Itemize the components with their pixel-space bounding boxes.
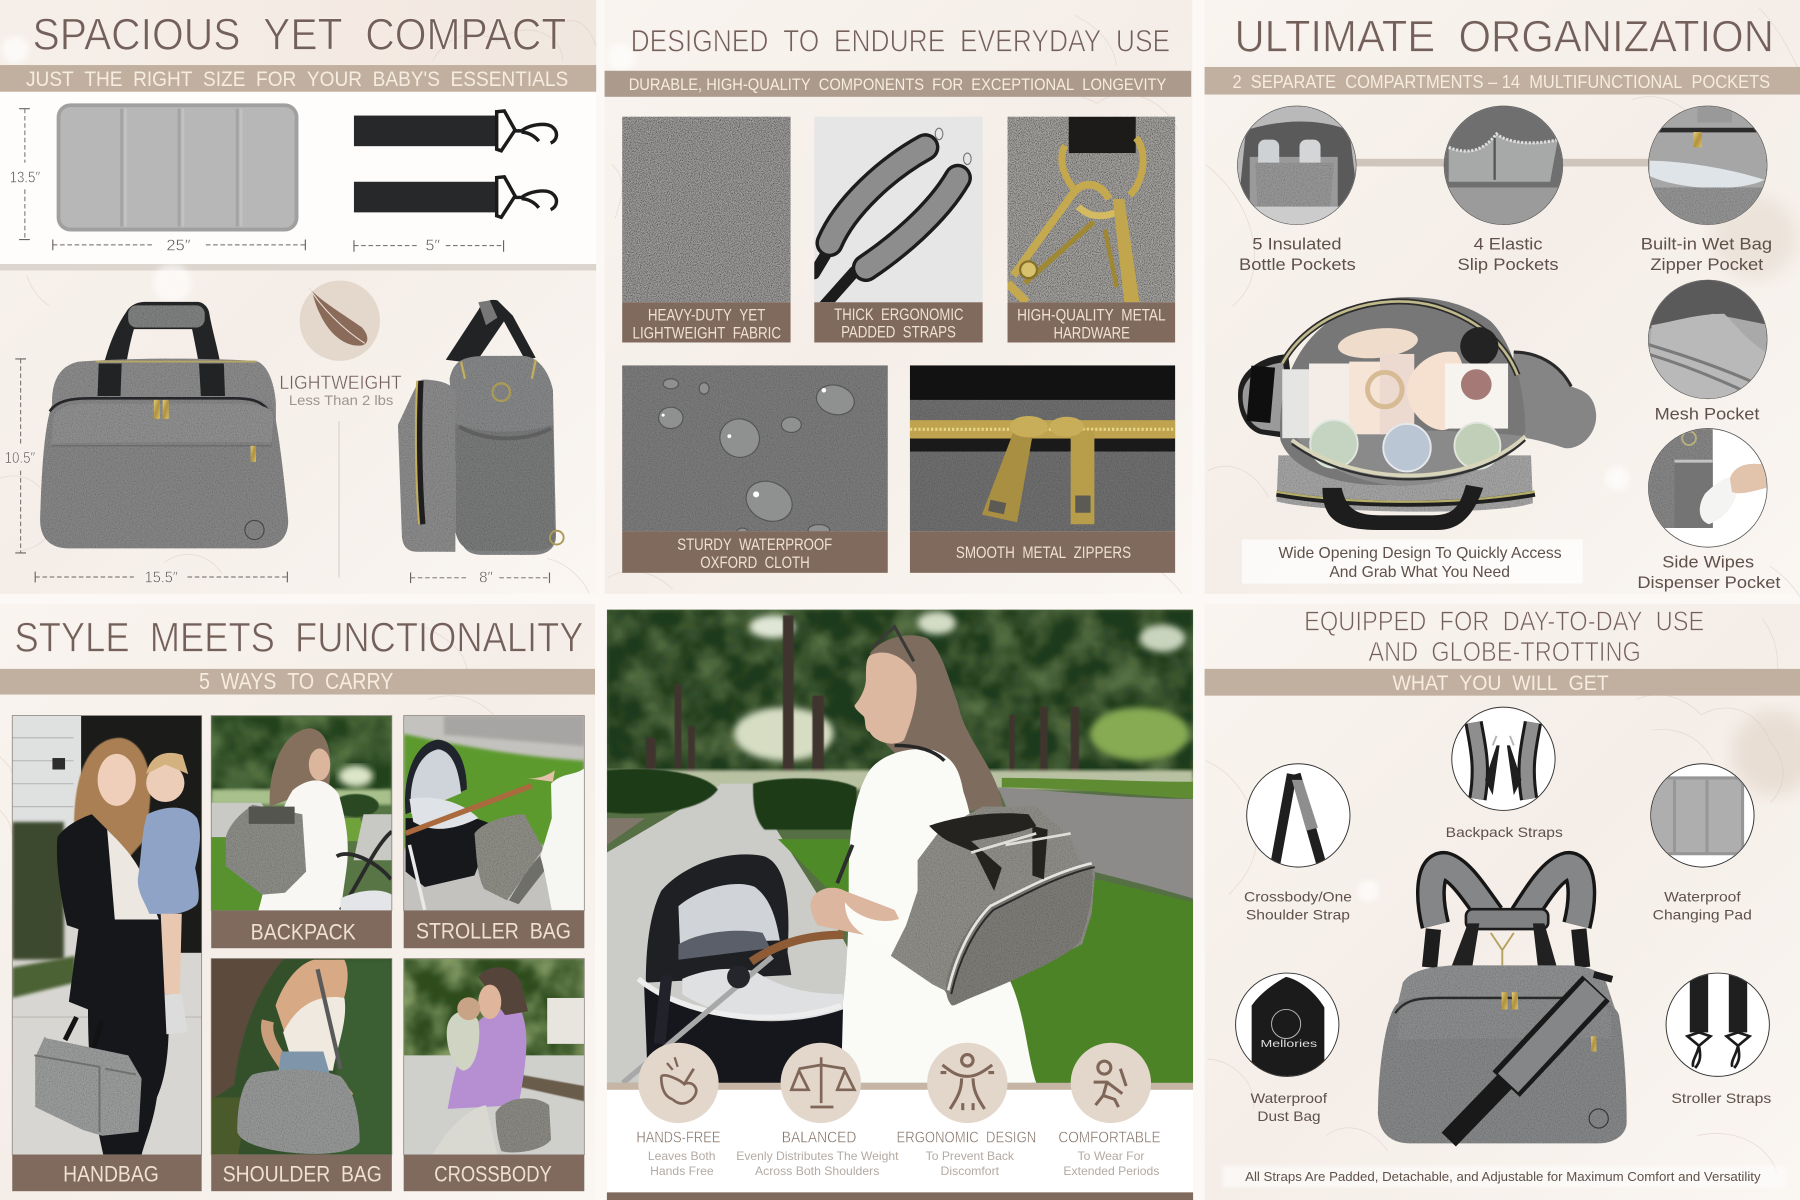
caption: wide opening <box>1242 540 1583 584</box>
dimension 13.5 <box>10 109 40 240</box>
changing pad <box>57 103 298 232</box>
title: EQUIPPED FOR DAY-TO-DAY USE <box>1304 606 1704 637</box>
title: ULTIMATE ORGANIZATION <box>1234 13 1774 62</box>
benefit labels: Evenly Distributes The Weight <box>736 1149 899 1163</box>
dimension 10.5: 10.5″ <box>5 449 35 467</box>
caption: wide opening: And Grab What You Need <box>1329 563 1510 581</box>
tile: backpack: BACKPACK <box>251 919 356 944</box>
tile: padded straps: THICK ERGONOMIC <box>834 306 964 324</box>
bag side view <box>398 300 564 555</box>
bag with backpack straps <box>1378 866 1627 1143</box>
dimension 25: 25″ <box>166 237 191 255</box>
circle: stroller straps <box>1666 971 1769 1076</box>
label: dust bag: Waterproof <box>1251 1090 1327 1106</box>
title <box>1304 606 1704 667</box>
dimension 25 <box>53 237 305 255</box>
label: changing pad: Changing Pad <box>1653 907 1752 923</box>
caption: wide opening: Wide Opening Design To Quickly Access <box>1278 544 1562 562</box>
tile: stroller bag: STROLLER BAG <box>416 918 571 943</box>
label: changing pad <box>1653 889 1752 923</box>
labels: top pockets: Slip Pockets <box>1458 255 1559 274</box>
subtitle band: 5 WAYS TO CARRY <box>199 668 393 694</box>
label: dust bag: Dust Bag <box>1257 1108 1321 1124</box>
title: SPACIOUS YET COMPACT <box>33 11 566 60</box>
stroller strap top <box>354 111 557 151</box>
benefit labels: Leaves Both <box>648 1149 716 1163</box>
tile: metal hardware: HARDWARE <box>1053 324 1130 342</box>
label: wipes pocket <box>1637 552 1781 592</box>
tile: metal hardware <box>1008 117 1175 342</box>
labels: top pockets: Zipper Pocket <box>1650 255 1764 274</box>
subtitle band: DURABLE, HIGH-QUALITY COMPONENTS FOR EXCEPTIONAL LONGEVITY <box>629 75 1166 94</box>
icon: comfortable <box>1071 1043 1151 1123</box>
title: STYLE MEETS FUNCTIONALITY <box>15 614 584 661</box>
tile: waterproof cloth: OXFORD CLOTH <box>700 554 810 572</box>
hair <box>870 635 1004 810</box>
tile: waterproof cloth: STURDY WATERPROOF <box>677 536 832 554</box>
tile: stroller bag <box>404 716 584 948</box>
label: changing pad: Waterproof <box>1664 889 1741 905</box>
dimension 15.5 <box>35 568 287 586</box>
face <box>854 653 917 744</box>
subtitle band <box>1205 669 1800 696</box>
dimension 5: 5″ <box>426 237 440 255</box>
circle: backpack straps <box>1452 707 1555 810</box>
bag front view <box>40 302 288 548</box>
subtitle band <box>605 71 1191 97</box>
circle: bottle pockets <box>1236 105 1361 230</box>
tile: waterproof cloth <box>622 365 888 573</box>
label: mesh pocket: Mesh Pocket <box>1655 404 1760 423</box>
tile: handbag <box>12 716 202 1191</box>
label: shoulder strap: Crossbody/One <box>1244 889 1352 905</box>
dimension 13.5: 13.5″ <box>10 169 40 187</box>
labels: top pockets: 4 Elastic <box>1474 234 1542 253</box>
benefit labels: Across Both Shoulders <box>755 1164 879 1178</box>
tile: shoulder bag: SHOULDER BAG <box>223 1162 382 1187</box>
label: backpack straps: Backpack Straps <box>1446 824 1563 840</box>
dimension 15.5: 15.5″ <box>145 568 178 586</box>
circle: mesh pocket <box>1648 279 1770 404</box>
tile: metal hardware: HIGH-QUALITY METAL <box>1017 307 1166 325</box>
circle: elastic pockets <box>1443 105 1565 228</box>
tile: shoulder bag <box>211 959 392 1191</box>
stroller strap bottom <box>354 177 557 217</box>
circle: wet bag pocket <box>1648 105 1770 228</box>
circle: shoulder strap <box>1247 764 1350 868</box>
tile: padded straps <box>814 117 983 342</box>
footer note: All Straps Are Padded, Detachable, and Adjustable for Maximum Comfort and Versatility <box>1245 1169 1761 1184</box>
panel: style meets functionality <box>0 604 595 1200</box>
stroller <box>646 854 791 983</box>
dimension 5 <box>354 237 504 255</box>
label: shoulder strap: Shoulder Strap <box>1246 907 1350 923</box>
circle: dust bag <box>1236 973 1339 1080</box>
labels: top pockets: Built-in Wet Bag <box>1641 234 1772 253</box>
benefit labels: ERGONOMIC DESIGN <box>897 1130 1036 1147</box>
lightweight label: Less Than 2 lbs <box>289 392 393 408</box>
dimension 8 <box>411 568 549 586</box>
labels: top pockets: Bottle Pockets <box>1239 255 1356 274</box>
labels: top pockets: 5 Insulated <box>1252 234 1342 253</box>
benefit labels: To Wear For <box>1078 1149 1145 1163</box>
circle: changing pad <box>1648 764 1754 867</box>
circle: wipes pocket <box>1648 429 1767 547</box>
backpack <box>891 807 1096 1006</box>
labels: top pockets <box>1239 234 1772 274</box>
panel: spacious yet compact <box>0 0 596 594</box>
icon: feather <box>300 280 380 361</box>
circle: dust bag: Mellories <box>1260 1039 1317 1050</box>
tile: metal zippers <box>910 365 1175 573</box>
icon: balance <box>781 1043 861 1123</box>
tile: backpack <box>211 716 392 948</box>
subtitle band: JUST THE RIGHT SIZE FOR YOUR BABY'S ESSENTIALS <box>26 68 568 91</box>
photo: woman with stroller <box>607 610 1193 1083</box>
icon: hands-free <box>638 1043 719 1123</box>
dimension 10.5 <box>5 359 35 553</box>
title: DESIGNED TO ENDURE EVERYDAY USE <box>631 24 1170 59</box>
benefit labels: Discomfort <box>941 1164 1000 1178</box>
subtitle band <box>0 668 595 695</box>
tile: crossbody <box>404 959 584 1191</box>
panel: ultimate organization <box>1205 0 1800 597</box>
panel: lifestyle photo and benefits <box>607 610 1193 1200</box>
label: shoulder strap <box>1244 889 1352 923</box>
tile: fabric: HEAVY-DUTY YET <box>648 307 765 325</box>
dimension 8: 8″ <box>479 568 493 586</box>
benefit labels <box>636 1130 1161 1178</box>
benefit labels: Hands Free <box>650 1164 714 1178</box>
open bag with contents <box>1238 297 1596 530</box>
tile: fabric <box>622 117 791 342</box>
tile: padded straps: PADDED STRAPS <box>841 323 956 341</box>
panel: what you will get <box>1205 604 1800 1200</box>
icon: ergonomic figure <box>927 1043 1008 1123</box>
footer note <box>1223 1166 1785 1187</box>
label: dust bag <box>1251 1090 1327 1124</box>
label: wipes pocket: Side Wipes <box>1662 552 1754 571</box>
lightweight label <box>279 373 402 408</box>
panel: designed to endure <box>605 0 1192 594</box>
tile: crossbody: CROSSBODY <box>434 1162 552 1187</box>
label: wipes pocket: Dispenser Pocket <box>1637 573 1781 592</box>
benefit labels: COMFORTABLE <box>1058 1130 1161 1147</box>
lightweight label: LIGHTWEIGHT <box>279 373 402 394</box>
benefit labels: BALANCED <box>782 1130 856 1147</box>
benefit labels: To Prevent Back <box>926 1149 1015 1163</box>
benefit labels: Extended Periods <box>1063 1164 1159 1178</box>
subtitle band: WHAT YOU WILL GET <box>1392 671 1609 695</box>
title: AND GLOBE-TROTTING <box>1368 636 1641 667</box>
tile: fabric: LIGHTWEIGHT FABRIC <box>633 324 781 342</box>
label: stroller straps: Stroller Straps <box>1671 1090 1771 1106</box>
tile: metal zippers: SMOOTH METAL ZIPPERS <box>956 544 1131 562</box>
tile: handbag: HANDBAG <box>63 1162 159 1187</box>
benefit labels: HANDS-FREE <box>636 1130 721 1147</box>
